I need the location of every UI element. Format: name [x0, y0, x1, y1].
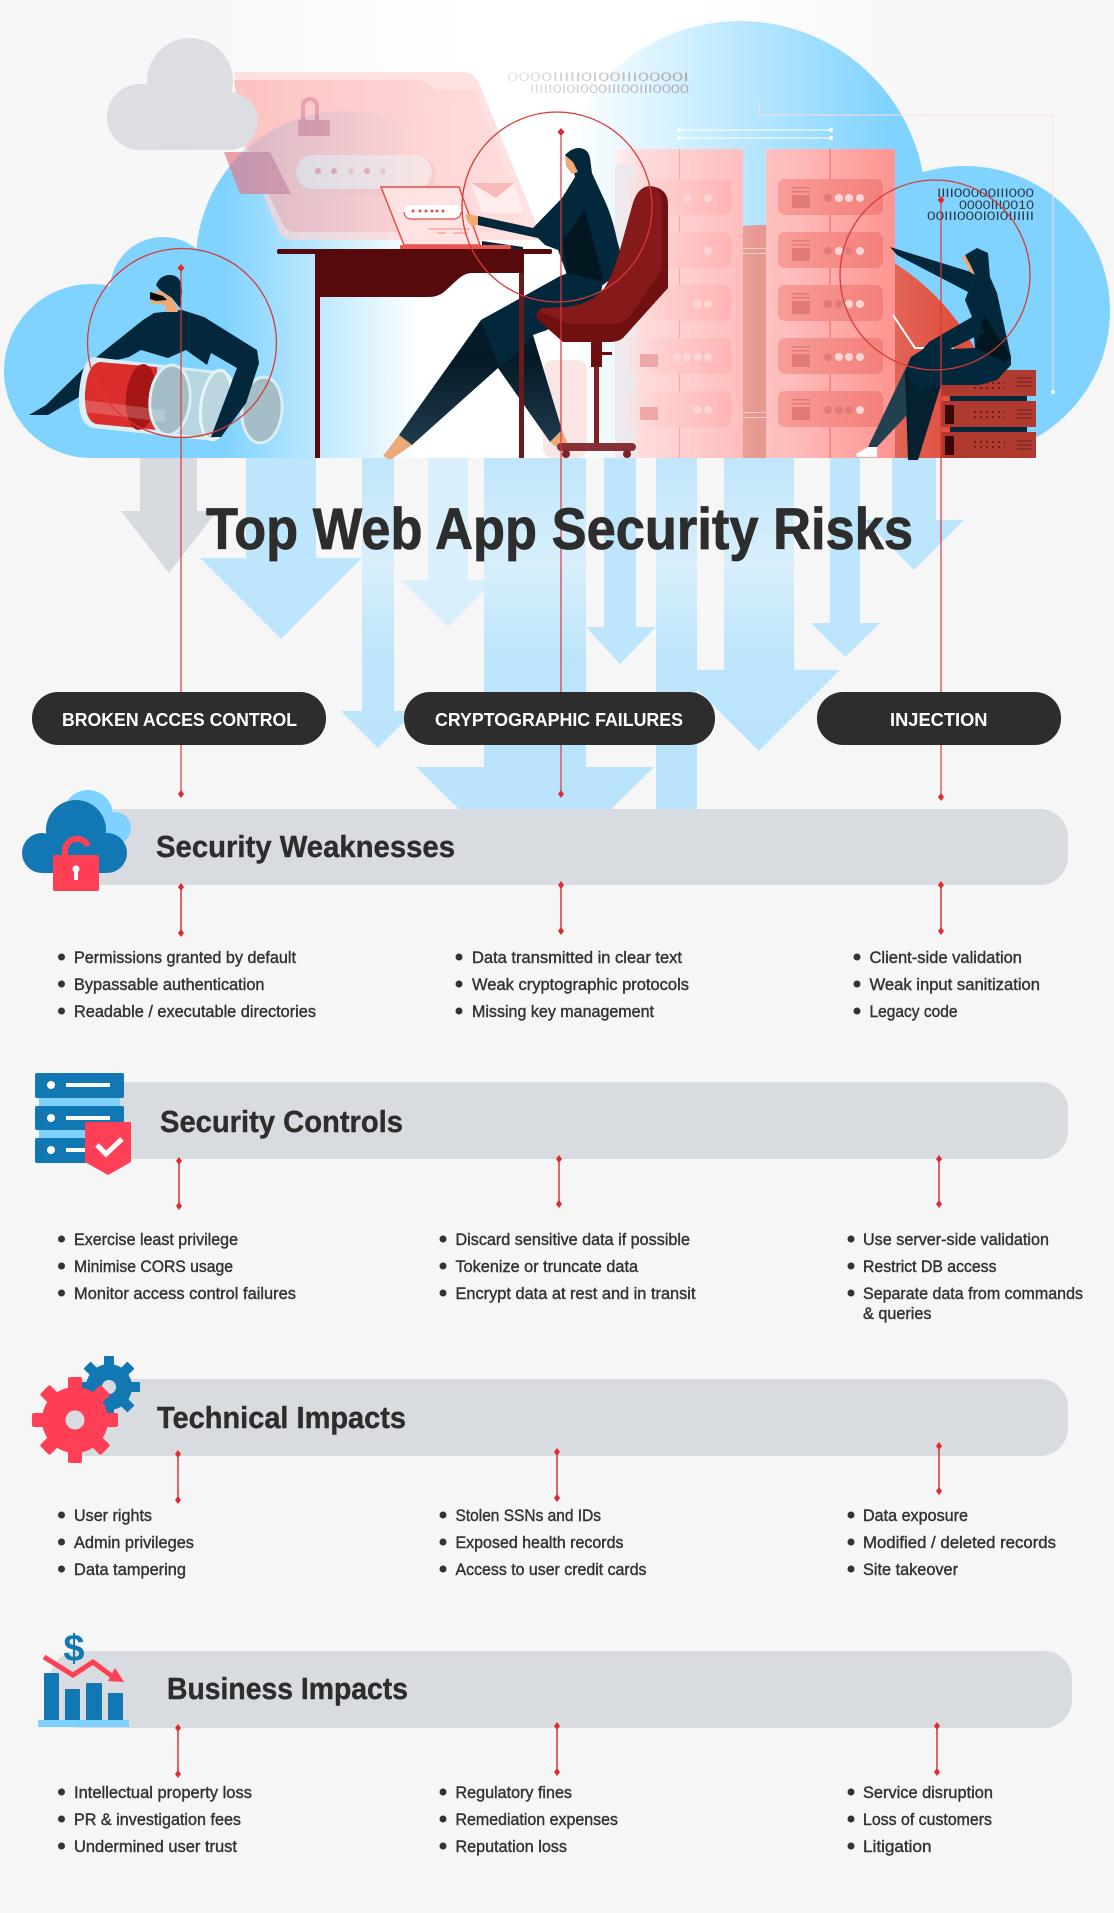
arrows falling from the hero [121, 458, 964, 884]
list column 1: Minimise CORS usage [74, 1258, 233, 1276]
section: business impacts [38, 1628, 1072, 1856]
icon: grey cloud [107, 38, 258, 150]
decorative circuit lines [677, 100, 1055, 394]
heading: Business Impacts [167, 1671, 408, 1706]
binary digits, top [507, 70, 689, 96]
list column 3: Legacy code [870, 1003, 958, 1021]
list column 3: Client-side validation [870, 949, 1022, 967]
list column 1: PR & investigation fees [74, 1811, 241, 1829]
list column 3 [848, 1507, 1056, 1579]
section: technical impacts [32, 1356, 1068, 1579]
icon: gears [32, 1356, 140, 1463]
list column 3: Use server-side validation [863, 1231, 1049, 1249]
list column 2: Remediation expenses [456, 1811, 618, 1829]
heading bar [50, 1651, 1072, 1728]
title: Top Web App Security Risks [206, 497, 913, 562]
list column 2: Discard sensitive data if possible [456, 1231, 690, 1249]
hero background clouds [4, 21, 1110, 458]
heading: Security Controls [160, 1104, 403, 1139]
heading bar [60, 809, 1068, 885]
list column 2: Data transmitted in clear text [472, 949, 682, 967]
binary digits, right: IIII00000III000 [937, 186, 1034, 200]
connectors [175, 1722, 940, 1778]
icon: cloud with open padlock [22, 790, 131, 891]
heading bar [60, 1082, 1068, 1159]
list column 2 [440, 1784, 618, 1856]
heading: Security Weaknesses [156, 829, 455, 864]
list column 3: Weak input sanitization [870, 976, 1040, 994]
binary digits, right [927, 186, 1034, 223]
list column 1 [58, 1784, 252, 1856]
figure: hacker carrying data barrel [29, 275, 285, 445]
list column 1 [58, 1231, 296, 1303]
list column 2: Tokenize or truncate data [456, 1258, 639, 1276]
heading bar [60, 1379, 1068, 1456]
list column 1: Permissions granted by default [74, 949, 296, 967]
list column 1 [58, 1507, 194, 1579]
list column 1: Bypassable authentication [74, 976, 264, 994]
pill: broken access control [32, 692, 326, 745]
binary digits, top: 0000IIIII0I00III0000I [507, 70, 689, 84]
list column 1: Data tampering [74, 1561, 186, 1579]
pill: injection [817, 692, 1061, 745]
icon: server stack with shield [35, 1073, 131, 1175]
list column 3: & queries [863, 1305, 932, 1323]
list column 2 [440, 1231, 696, 1303]
list column 1: Undermined user trust [74, 1838, 237, 1856]
list column 1: Monitor access control failures [74, 1285, 296, 1303]
desk [277, 249, 552, 458]
list column 1: Admin privileges [74, 1534, 194, 1552]
list column 3 [848, 1231, 1083, 1323]
connectors [178, 881, 944, 937]
pill: cryptographic failures: CRYPTOGRAPHIC FAILURES [435, 709, 683, 730]
list column 3 [848, 1784, 993, 1856]
list column 3: Site takeover [863, 1561, 958, 1579]
section: security controls [35, 1073, 1083, 1323]
pill: injection: INJECTION [890, 709, 988, 730]
list column 1: Intellectual property loss [74, 1784, 252, 1802]
login browser panel [224, 72, 543, 240]
binary digits, right: 00III000I0I0IIIIII [927, 209, 1034, 223]
list column 3: Litigation [863, 1838, 932, 1856]
figure: hacker on server stack [856, 247, 1036, 460]
list column 3 [854, 949, 1040, 1021]
list column 1: Exercise least privilege [74, 1231, 238, 1249]
list column 3: Service disruption [863, 1784, 993, 1802]
list column 2: Reputation loss [456, 1838, 567, 1856]
binary digits, top: IIIII0I0I000III00III0000 [530, 82, 689, 96]
list column 3: Restrict DB access [863, 1258, 996, 1276]
server racks [615, 149, 895, 458]
list column 2: Regulatory fines [456, 1784, 572, 1802]
connectors [175, 1442, 942, 1504]
icon: falling revenue chart: $ [63, 1628, 85, 1670]
list column 2: Stolen SSNs and IDs [456, 1507, 601, 1525]
laptop on desk [381, 187, 511, 249]
figure: seated hacker at desk [383, 148, 622, 460]
list column 2: Missing key management [472, 1003, 654, 1021]
section: security weaknesses [22, 790, 1068, 1021]
heading: Technical Impacts [157, 1400, 406, 1435]
list column 2: Exposed health records [456, 1534, 624, 1552]
list column 2 [440, 1507, 646, 1579]
list column 2: Encrypt data at rest and in transit [456, 1285, 696, 1303]
pill: cryptographic failures [404, 692, 715, 745]
red focus rings and pins [88, 112, 1030, 438]
list column 3: Modified / deleted records [863, 1534, 1056, 1552]
list column 1 [58, 949, 316, 1021]
list column 3: Separate data from commands [863, 1285, 1083, 1303]
office chair [537, 186, 668, 458]
hand on laptop [466, 214, 478, 226]
binary digits, right: 0000III0010 [959, 198, 1034, 212]
list column 2: Access to user credit cards [456, 1561, 646, 1579]
list column 2 [456, 949, 689, 1021]
list column 3: Data exposure [863, 1507, 968, 1525]
connectors [176, 1155, 942, 1210]
list column 1: User rights [74, 1507, 152, 1525]
icon: falling revenue chart [38, 1628, 129, 1727]
list column 3: Loss of customers [863, 1811, 992, 1829]
list column 2: Weak cryptographic protocols [472, 976, 689, 994]
red connector lines from hero [178, 128, 944, 801]
pill: broken access control: BROKEN ACCES CONTROL [62, 709, 297, 730]
list column 1: Readable / executable directories [74, 1003, 316, 1021]
